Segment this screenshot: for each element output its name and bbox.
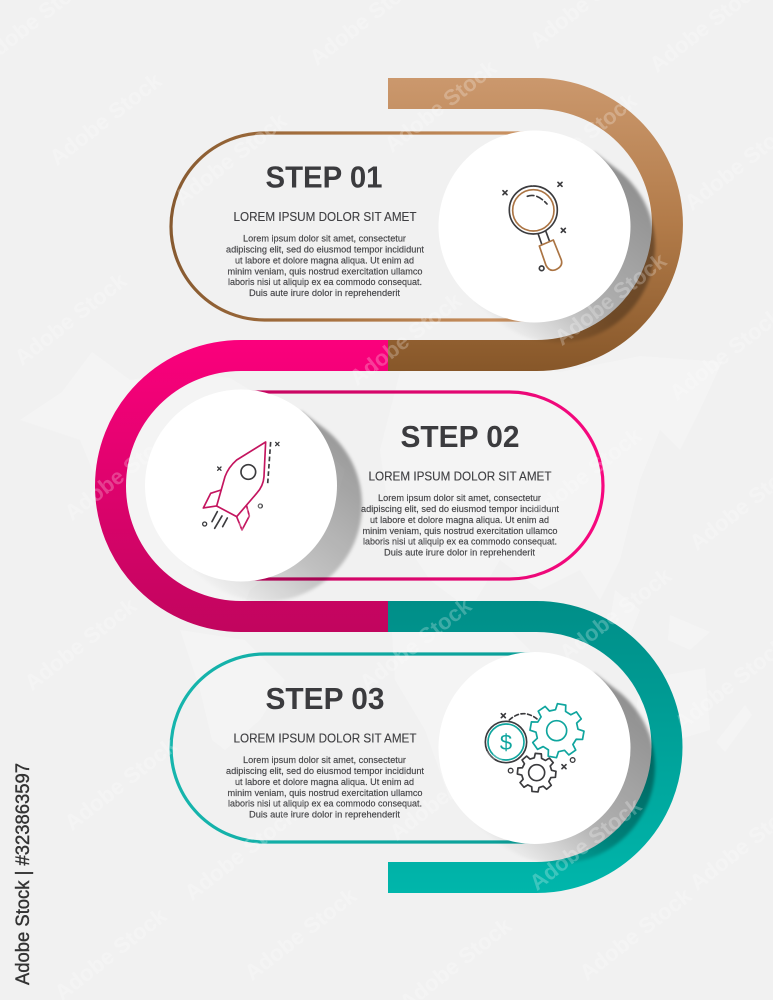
text block: step 03 bbox=[226, 681, 424, 820]
body copy: step 03: adipiscing elit, sed do eiusmod tempor incididunt bbox=[226, 766, 424, 777]
panel: step 02 bbox=[110, 356, 603, 616]
stock watermark pattern: Adobe Stock bbox=[170, 107, 292, 210]
body copy: step 03: Duis aute irure dolor in reprehenderit bbox=[249, 810, 400, 820]
world map backdrop bbox=[20, 352, 752, 800]
icon: coin and gears bbox=[485, 700, 588, 793]
circle: step 02 bbox=[145, 390, 337, 582]
body copy: step 01 bbox=[226, 234, 424, 299]
body copy: step 01: minim veniam, quis nostrud exercitation ullamco bbox=[228, 266, 422, 277]
stock watermark pattern: Adobe Stock bbox=[525, 422, 647, 525]
body copy: step 02: minim veniam, quis nostrud exercitation ullamco bbox=[362, 526, 558, 537]
body copy: step 02: Lorem ipsum dolor sit amet, consectetur bbox=[378, 493, 542, 504]
body copy: step 02: Duis aute irure dolor in reprehenderit bbox=[384, 548, 535, 558]
stock watermark pattern: Adobe Stock bbox=[380, 54, 502, 157]
stock watermark pattern: Adobe Stock bbox=[575, 882, 697, 985]
icon: rocket bbox=[203, 442, 279, 530]
stock watermark pattern: Adobe Stock bbox=[520, 87, 642, 190]
stock watermark pattern: Adobe Stock bbox=[45, 67, 167, 170]
pink ribbon band bbox=[110, 356, 388, 616]
subheading: step 02: LOREM IPSUM DOLOR SIT AMET bbox=[368, 470, 552, 484]
body copy: step 03 bbox=[226, 755, 424, 820]
stock watermark pattern: Adobe Stock bbox=[60, 732, 182, 835]
stock watermark pattern: Adobe Stock bbox=[525, 792, 647, 895]
body copy: step 01: adipiscing elit, sed do eiusmod tempor incididunt bbox=[226, 244, 424, 256]
text block: step 01 bbox=[226, 160, 424, 299]
body copy: step 02: adipiscing elit, sed do eiusmod tempor incididunt bbox=[361, 504, 559, 515]
stock watermark pattern: Adobe Stock bbox=[180, 802, 302, 905]
stock watermark pattern: Adobe Stock bbox=[355, 592, 477, 695]
circle: step 03 bbox=[438, 652, 630, 844]
body copy: step 03: ut labore et dolore magna aliqua. Ut enim ad bbox=[235, 777, 414, 788]
text block: step 02 bbox=[361, 419, 559, 558]
stock watermark pattern: Adobe Stock bbox=[10, 267, 132, 370]
brown pill outline bbox=[171, 133, 535, 320]
stock watermark pattern: Adobe Stock bbox=[550, 247, 672, 350]
heading: step 03: STEP 03 bbox=[266, 681, 384, 716]
heading: step 02: STEP 02 bbox=[400, 419, 520, 454]
body copy: step 03: Lorem ipsum dolor sit amet, consectetur bbox=[243, 755, 407, 766]
body copy: step 01: ut labore et dolore magna aliqua. Ut enim ad bbox=[235, 256, 414, 266]
subheading: step 03: LOREM IPSUM DOLOR SIT AMET bbox=[234, 732, 417, 746]
stock id side label: Adobe Stock | #323863597 bbox=[13, 763, 34, 985]
circle shadow: step 03 bbox=[475, 673, 655, 863]
circle: step 01 bbox=[438, 130, 630, 322]
icon: magnifying glass bbox=[503, 182, 565, 271]
stock watermark pattern: Adobe Stock bbox=[180, 472, 302, 575]
heading: step 01: STEP 01 bbox=[266, 160, 382, 194]
brown ribbon band bbox=[388, 94, 667, 356]
subheading: step 01: LOREM IPSUM DOLOR SIT AMET bbox=[234, 210, 417, 224]
body copy: step 02: laboris nisi ut aliquip ex ea commodo consequat. bbox=[363, 537, 557, 548]
stock watermark pattern: Adobe Stock bbox=[20, 592, 142, 695]
circle shadow: step 01 bbox=[475, 152, 655, 343]
body copy: step 03: minim veniam, quis nostrud exercitation ullamco bbox=[228, 788, 422, 799]
stock watermark pattern: Adobe Stock bbox=[385, 742, 507, 845]
icon: coin and gears: $ bbox=[500, 730, 512, 755]
body copy: step 01: Duis aute irure dolor in reprehenderit bbox=[249, 288, 400, 299]
teal ribbon band bbox=[388, 616, 667, 878]
body copy: step 01: laboris nisi ut aliquip ex ea commodo consequat. bbox=[228, 277, 422, 288]
panel: step 01 bbox=[171, 94, 667, 356]
teal pill outline bbox=[171, 654, 535, 842]
body copy: step 02 bbox=[361, 493, 559, 558]
body copy: step 02: ut labore et dolore magna aliqua. Ut enim ad bbox=[370, 515, 549, 526]
stock watermark pattern: Adobe Stock bbox=[240, 882, 362, 985]
circle shadow: step 02 bbox=[182, 411, 362, 602]
stock watermark pattern: Adobe Stock bbox=[345, 287, 467, 390]
body copy: step 03: laboris nisi ut aliquip ex ea commodo consequat. bbox=[228, 799, 422, 810]
pink pill outline bbox=[240, 392, 603, 579]
stock watermark pattern: Adobe Stock bbox=[60, 422, 182, 525]
body copy: step 01: Lorem ipsum dolor sit amet, consectetur bbox=[243, 234, 407, 244]
stock watermark pattern: Adobe Stock bbox=[555, 562, 677, 665]
panel: step 03 bbox=[171, 616, 667, 878]
